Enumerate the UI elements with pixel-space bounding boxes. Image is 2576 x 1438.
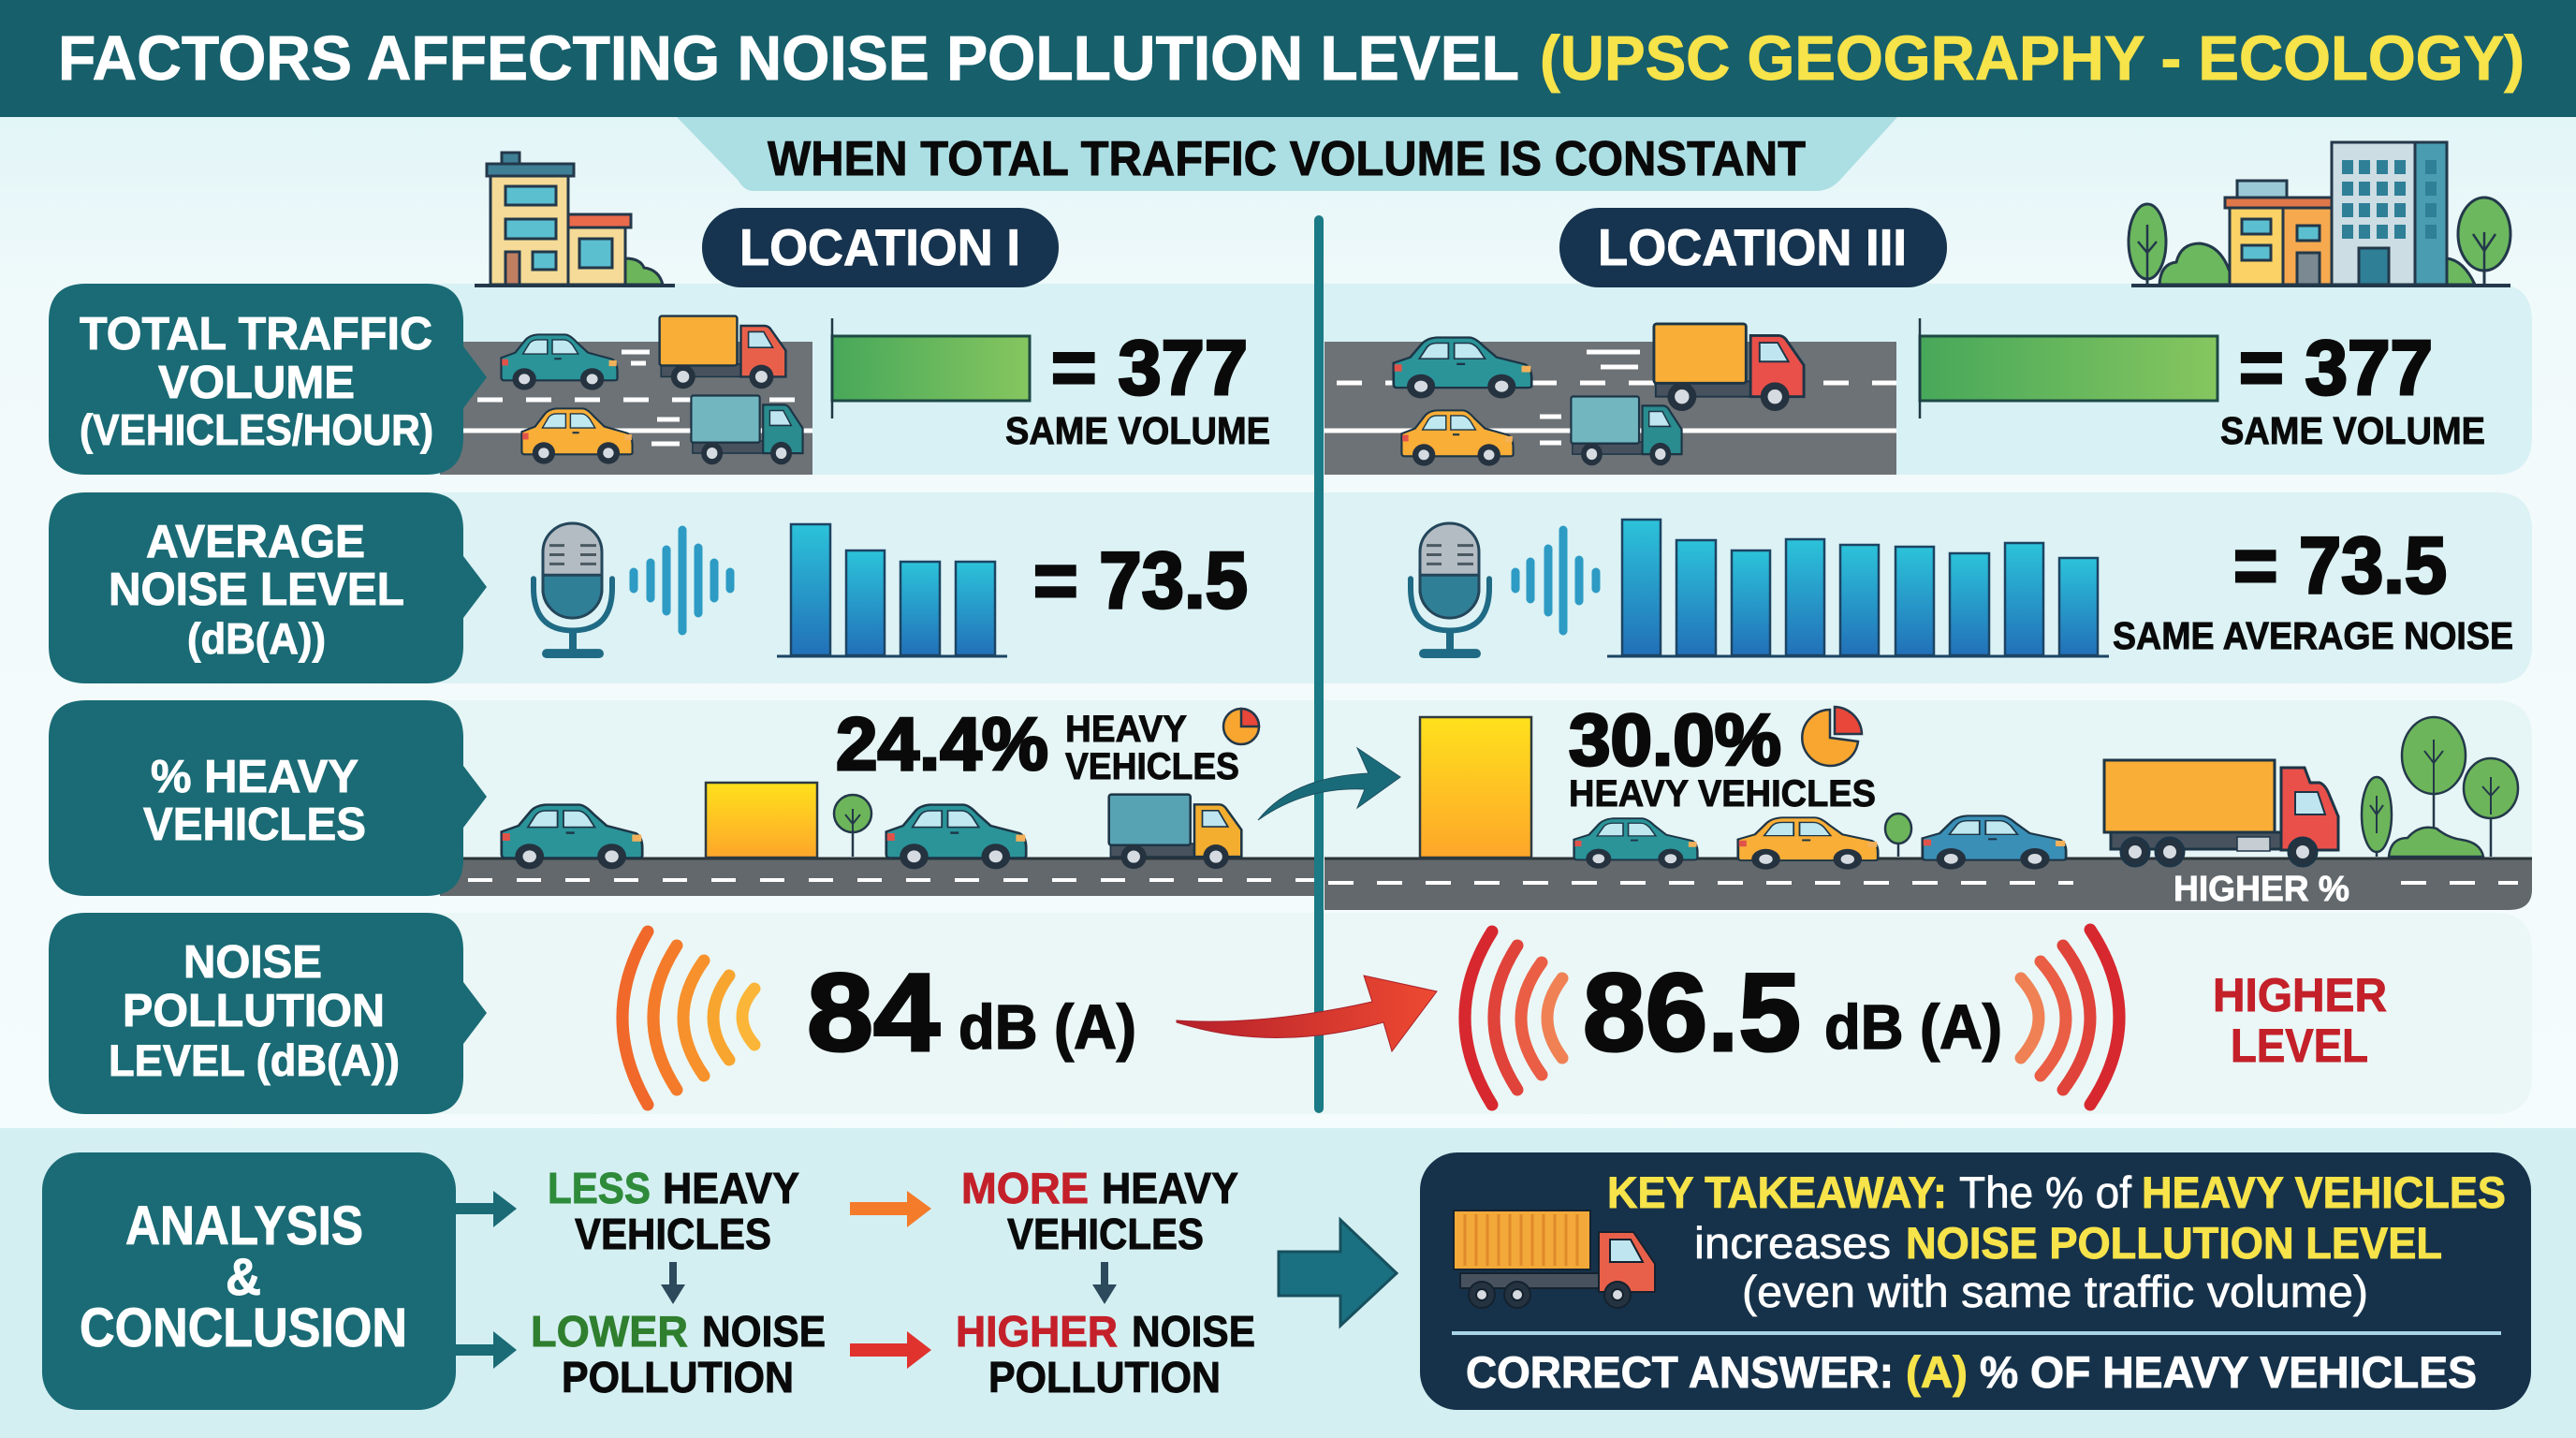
subtitle banner: WHEN TOTAL TRAFFIC VOLUME IS CONSTANT [768,132,1806,186]
text: key takeaway: KEY TAKEAWAY: [1607,1167,1947,1217]
arrow: to upper analysis [456,1191,517,1227]
text: correct answer [1466,1347,2477,1397]
arrow: to lower analysis [456,1331,517,1369]
row label: percent heavy vehicles [49,700,487,896]
text: higher noise pollution: POLLUTION [988,1353,1221,1401]
arrow: orange less to more [850,1191,931,1227]
text: higher noise pollution: HIGHER [956,1307,1118,1356]
value: location III volume [2220,324,2485,452]
text: less heavy vehicles [548,1164,799,1258]
value: 24.4 percent heavy vehicles: HEAVY [1065,709,1187,750]
location I pill: LOCATION I [739,218,1020,276]
icon: location I buildings [475,153,675,286]
text: key takeaway: HEAVY VEHICLES [2142,1167,2506,1217]
road: location III [1325,342,1896,475]
text: correct answer: (A) [1906,1347,1968,1397]
subtitle banner [677,117,1897,191]
text: less heavy vehicles: HEAVY [663,1164,799,1212]
icon: container truck [1454,1211,1655,1308]
value: location I noise: = 73.5 [1033,536,1248,625]
text: correct answer: % OF HEAVY VEHICLES [1980,1347,2477,1397]
title text: FACTORS AFFECTING NOISE POLLUTION LEVEL [58,23,1519,94]
center divider [1314,215,1324,1113]
text: key takeaway: increases [1694,1218,1891,1268]
icon: orange sound arcs [622,932,754,1105]
value: location I volume [1005,324,1270,452]
bar: location I heavy share [706,783,817,858]
location III pill [1559,208,1947,287]
value: 30 percent heavy vehicles: 30.0% [1569,698,1781,781]
value: 30 percent heavy vehicles: HEAVY VEHICLES [1569,773,1876,814]
row label: noise pollution level: LEVEL (dB(A)) [109,1035,400,1085]
value: 86.5 dB(A): dB (A) [1824,992,2002,1063]
label: higher level [2213,969,2387,1072]
icon: red sound arcs right [2021,930,2119,1105]
arrow: to key takeaway [1279,1220,1397,1326]
vehicles: location I [502,795,1241,869]
divider [1452,1331,2501,1335]
icon: large pie chart [1802,707,1862,766]
road: location I [440,858,1320,896]
row label: average noise level: AVERAGE [146,517,365,567]
arrow: more to higher [1092,1262,1117,1304]
text: key takeaway: (even with same traffic volume) [1742,1267,2368,1316]
panel: total traffic volume [421,284,2532,475]
value: location III noise: = 73.5 [2233,521,2447,610]
label: higher level: HIGHER [2213,969,2387,1021]
value: location I volume: SAME VOLUME [1005,409,1270,452]
value: location III noise [2113,521,2513,657]
row label: percent heavy vehicles: % HEAVY [151,752,359,802]
text: more heavy vehicles: MORE [961,1164,1089,1212]
label: higher level: LEVEL [2231,1020,2368,1072]
vehicle: big truck [2104,760,2338,866]
value: location I volume: = 377 [1051,324,1248,411]
vehicles: location I [501,316,803,464]
row label: total traffic volume: (VEHICLES/HOUR) [80,405,433,454]
text: more heavy vehicles: VEHICLES [1007,1210,1204,1258]
label: higher percent: HIGHER % [2174,870,2349,909]
text: more heavy vehicles [961,1164,1238,1258]
icon: sound wave right [1515,530,1596,631]
value: 84 dB(A): 84 [807,951,940,1075]
label: analysis and conclusion [42,1152,456,1410]
value: 84 dB(A) [807,951,1136,1075]
row label: average noise level [49,492,487,683]
value: 30 percent heavy vehicles [1569,698,1876,814]
bar: location III volume [1920,318,2217,418]
row label: noise pollution level [49,913,487,1114]
text: lower noise pollution: NOISE [702,1307,826,1356]
text: lower noise pollution [531,1307,826,1401]
value: location III noise: SAME AVERAGE NOISE [2113,614,2513,657]
bar: location I volume [832,318,1030,418]
text: key takeaway: NOISE POLLUTION LEVEL [1906,1218,2442,1268]
label: analysis and conclusion: CONCLUSION [80,1298,407,1358]
label: analysis and conclusion: ANALYSIS [125,1196,363,1256]
text: more heavy vehicles: HEAVY [1102,1164,1238,1212]
title subject in yellow: (UPSC GEOGRAPHY - ECOLOGY) [1540,23,2525,94]
icon: microphone left [534,523,612,658]
value: 24.4 percent heavy vehicles: VEHICLES [1065,746,1239,787]
vehicles: location III [1394,324,1804,466]
value: 24.4 percent heavy vehicles: 24.4% [836,702,1048,785]
text: lower noise pollution: LOWER [531,1307,688,1356]
value: 86.5 dB(A): 86.5 [1583,951,1801,1075]
text: lower noise pollution: POLLUTION [562,1353,794,1401]
panel: noise pollution level [421,913,2532,1114]
tree: location I [834,795,871,857]
bar chart: location III noise [1607,520,2109,656]
row label: total traffic volume: VOLUME [158,358,355,408]
bar: location III heavy share [1420,717,1531,858]
vehicles: location III [1574,815,2066,870]
row label: noise pollution level: POLLUTION [123,986,385,1036]
arrow: noise level increase [1177,976,1437,1051]
icon: sound wave left [634,530,730,631]
value: 86.5 dB(A) [1583,951,2002,1075]
value: 84 dB(A): dB (A) [959,992,1136,1063]
panel: average noise level [421,492,2532,683]
text: key takeaway: The % of [1959,1167,2132,1217]
row label: total traffic volume: TOTAL TRAFFIC [80,309,432,360]
row label: percent heavy vehicles: VEHICLES [143,800,366,850]
bar chart: location I noise [777,524,1007,656]
label: analysis and conclusion: & [226,1247,261,1306]
arrow: heavy vehicles increase [1258,748,1400,820]
road: location I [440,342,812,475]
text: higher noise pollution [956,1307,1255,1401]
arrow: red lower to higher [850,1331,931,1369]
icon: red sound arcs left [1465,932,1562,1105]
value: location III volume: SAME VOLUME [2220,409,2485,452]
location I pill [702,208,1059,287]
icon: location III buildings [2129,142,2510,286]
icon: small pie chart [1223,709,1259,744]
title banner [0,0,2576,117]
arrow: less to lower [661,1262,685,1304]
panel: percent heavy vehicles [421,698,2532,910]
text: correct answer: CORRECT ANSWER: [1466,1347,1894,1397]
text: key takeaway [1607,1167,2506,1316]
row label: average noise level: (dB(A)) [187,614,326,663]
trees: location III [1885,717,2518,857]
text: less heavy vehicles: VEHICLES [575,1210,771,1258]
row label: average noise level: NOISE LEVEL [109,565,404,615]
value: location III volume: = 377 [2239,324,2433,411]
value: 24.4 percent heavy vehicles [836,702,1239,787]
road: location III [1325,858,2532,910]
text: less heavy vehicles: LESS [548,1164,651,1212]
text: higher noise pollution: NOISE [1132,1307,1255,1356]
icon: microphone right [1411,523,1489,658]
location III pill: LOCATION III [1598,218,1907,276]
panel: key takeaway [1420,1152,2531,1410]
row label: noise pollution level: NOISE [183,937,322,988]
panel: analysis and conclusion [0,1128,2576,1438]
row label: total traffic volume [49,284,487,475]
